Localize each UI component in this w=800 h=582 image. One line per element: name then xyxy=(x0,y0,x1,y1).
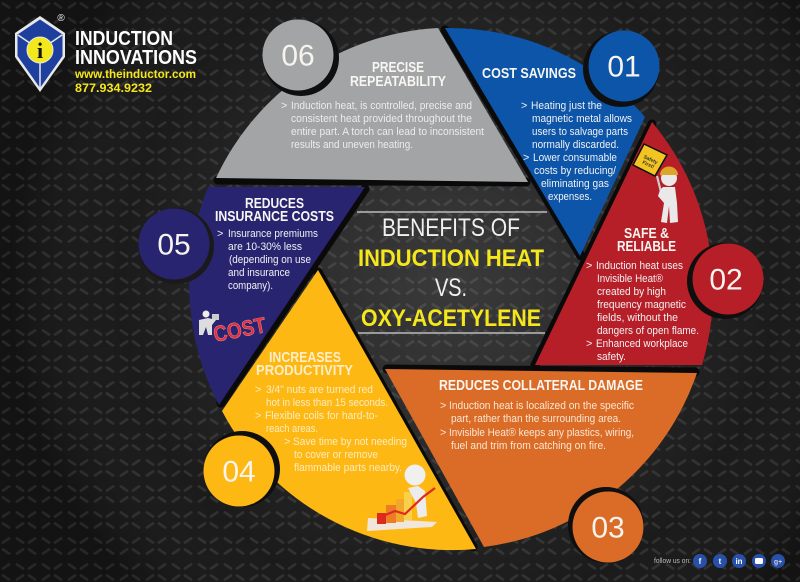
number badge 06 xyxy=(262,20,339,96)
icon: shield xyxy=(15,16,65,92)
body text: created by high xyxy=(597,286,666,298)
body text: > xyxy=(523,152,529,164)
phone: 877.934.9232 xyxy=(75,83,152,95)
body text xyxy=(521,100,633,203)
number badge 05 xyxy=(138,208,214,284)
body text: and insurance xyxy=(228,267,290,279)
body text: > xyxy=(255,410,261,422)
number badge 01 xyxy=(583,30,660,107)
body text xyxy=(440,400,635,452)
body text: costs by reducing/ xyxy=(534,165,616,177)
body text: > xyxy=(440,400,446,412)
number badge 03 xyxy=(568,487,644,563)
body text: entire part. A torch can lead to inconsistent xyxy=(291,126,484,138)
number badge 02 xyxy=(687,243,764,319)
body text: Induction heat uses xyxy=(596,260,684,272)
company name line two: INNOVATIONS xyxy=(75,47,197,69)
heading: SAFE & xyxy=(624,225,669,242)
number badge 06: 06 xyxy=(281,40,315,72)
icon: facebook: f xyxy=(699,557,702,566)
panel 05: reduces insurance costs xyxy=(189,187,365,405)
panel 01: cost savings xyxy=(445,28,645,256)
social links xyxy=(654,554,785,568)
heading: INSURANCE COSTS xyxy=(215,208,334,225)
body text: hot in less than 15 seconds. xyxy=(266,397,388,409)
body text: > xyxy=(281,100,287,112)
icon: safety worker with sign: Safety xyxy=(642,154,658,166)
heading xyxy=(350,59,446,90)
body text: Induction heat is localized on the specific xyxy=(449,400,635,412)
body text xyxy=(281,100,484,151)
center title xyxy=(357,211,547,334)
body text: expenses. xyxy=(548,191,592,203)
body text: company). xyxy=(228,280,273,292)
panel 03: reduces collateral damage xyxy=(385,369,697,547)
body text: reach areas. xyxy=(266,423,318,435)
panel 06: precise repeatability xyxy=(216,28,528,182)
body text: fuel and trim from catching on fire. xyxy=(451,440,606,452)
icon: cost figure: COST xyxy=(211,312,268,347)
body text: Save time by not needing xyxy=(293,436,407,448)
title line 4: OXY-ACETYLENE xyxy=(361,305,541,332)
body text: Invisible Heat® keeps any plastics, wiring, xyxy=(449,427,634,439)
body text: 3/4" nuts are turned red xyxy=(266,384,373,396)
number badge 01: 01 xyxy=(607,50,641,84)
heading xyxy=(215,195,334,225)
body text: results and uneven heating. xyxy=(291,139,413,151)
body text: Heating just the xyxy=(531,100,602,112)
body text: Lower consumable xyxy=(533,152,617,164)
number badge 04: 04 xyxy=(222,456,256,488)
heading: COST SAVINGS xyxy=(482,65,576,82)
body text: Flexible coils for hard-to- xyxy=(265,410,378,422)
heading: REPEATABILITY xyxy=(350,73,446,90)
body text: are 10-30% less xyxy=(228,241,303,253)
body text: > xyxy=(586,338,592,350)
body text: flammable parts nearby. xyxy=(294,462,402,474)
panel 04: increases productivity xyxy=(222,270,476,550)
body text: > xyxy=(440,427,446,439)
icon: youtube xyxy=(752,554,766,568)
body text: (depending on use xyxy=(229,254,311,266)
heading xyxy=(617,225,676,255)
follow label: follow us on: xyxy=(654,556,691,565)
logo xyxy=(15,13,197,95)
heading: PRODUCTIVITY xyxy=(256,362,353,379)
registered mark: ® xyxy=(57,13,65,24)
title line 2: INDUCTION HEAT xyxy=(358,245,544,272)
number badge 03: 03 xyxy=(591,512,625,544)
heading: INCREASES xyxy=(269,349,341,366)
body text: fields, without the xyxy=(597,312,678,324)
icon: shield: i xyxy=(37,38,43,63)
body text: frequency magnetic xyxy=(597,299,687,311)
number badge 04 xyxy=(204,431,280,507)
company name: INDUCTION xyxy=(75,28,173,50)
body text: > xyxy=(284,436,290,448)
heading: PRECISE xyxy=(372,59,424,76)
body text: part, rather than the surrounding area. xyxy=(451,413,621,425)
body text: Insurance premiums xyxy=(228,228,319,240)
icon: google plus: g+ xyxy=(774,559,782,566)
body text: normally discarded. xyxy=(532,139,619,151)
heading: RELIABLE xyxy=(617,238,676,255)
body text: > xyxy=(217,228,223,240)
website: www.theinductor.com xyxy=(74,69,196,81)
body text: > xyxy=(255,384,261,396)
icon: safety worker with sign xyxy=(633,144,678,223)
icon: linkedin: in xyxy=(735,557,743,566)
body text: safety. xyxy=(597,351,626,363)
body text: Induction heat, is controlled, precise and xyxy=(291,100,472,112)
panel 02: safe and reliable xyxy=(535,122,713,365)
icon: figure with rising chart xyxy=(367,464,437,531)
body text: magnetic metal allows xyxy=(532,113,633,125)
body text: to cover or remove xyxy=(294,449,378,461)
body text: > xyxy=(586,260,592,272)
title line 1: BENEFITS OF xyxy=(382,214,520,242)
body text: consistent heat provided throughout the xyxy=(291,113,472,125)
body text: users to salvage parts xyxy=(532,126,629,138)
body text: eliminating gas xyxy=(541,178,610,190)
heading: REDUCES xyxy=(245,195,304,212)
icon: twitter: t xyxy=(719,557,722,566)
body text: Invisible Heat® xyxy=(597,273,663,285)
body text: dangers of open flame. xyxy=(597,325,699,337)
heading xyxy=(256,349,353,379)
number badge 02: 02 xyxy=(709,264,743,296)
icon: safety worker with sign: First! xyxy=(641,160,655,171)
body text xyxy=(217,228,319,292)
body text: Enhanced workplace xyxy=(596,338,688,350)
body text xyxy=(255,384,407,474)
title line 3: VS. xyxy=(435,274,467,302)
body text xyxy=(586,260,699,363)
heading: REDUCES COLLATERAL DAMAGE xyxy=(439,377,643,394)
number badge 05: 05 xyxy=(157,228,191,262)
body text: > xyxy=(521,100,527,112)
